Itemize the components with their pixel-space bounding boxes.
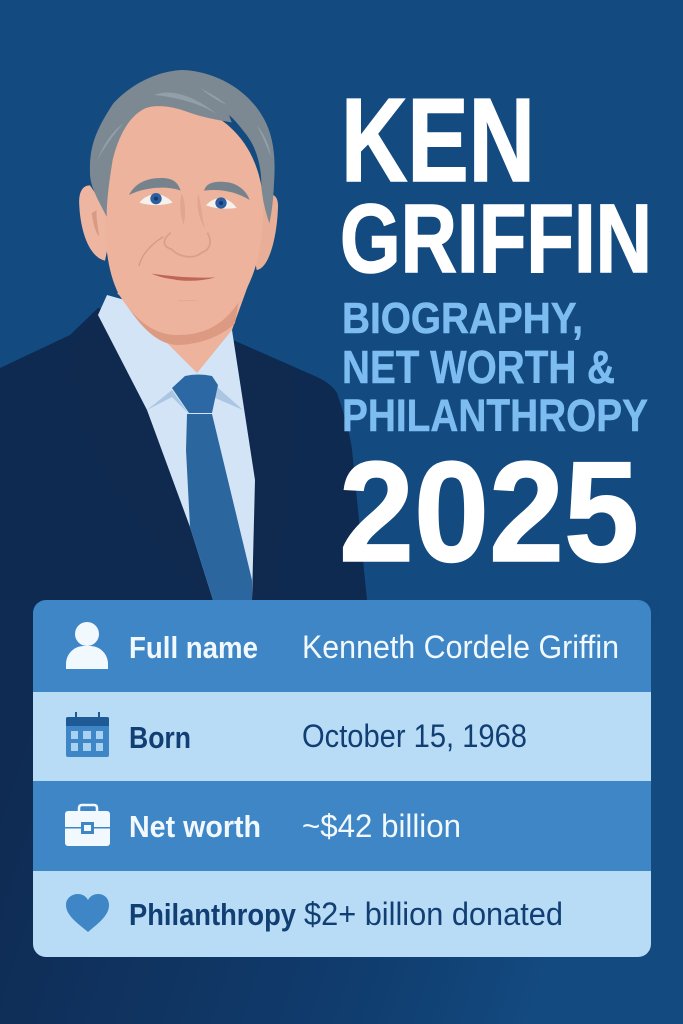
row: born xyxy=(66,712,527,757)
icon: calendar xyxy=(66,712,109,757)
eye white xyxy=(206,198,237,209)
chin shadow xyxy=(117,290,240,345)
right collar shadow xyxy=(213,387,243,410)
tie knot xyxy=(172,374,218,413)
left collar shadow xyxy=(147,390,188,413)
tie xyxy=(172,374,252,600)
value: ~$42 billion xyxy=(302,808,461,844)
pupil xyxy=(219,201,223,205)
left lapel xyxy=(66,308,213,600)
subtitle: biography: BIOGRAPHY, xyxy=(342,294,583,343)
left ear xyxy=(79,185,113,261)
nose xyxy=(164,233,210,257)
pupil xyxy=(154,197,158,201)
nose bridge shadows xyxy=(180,193,205,228)
label: Philanthropy xyxy=(129,897,297,932)
left ear shade xyxy=(92,210,99,237)
right eye xyxy=(206,197,237,209)
label: Born xyxy=(129,720,191,755)
label: Full name xyxy=(129,630,258,665)
lower background gradient xyxy=(0,600,683,1024)
icon: briefcase xyxy=(65,805,110,846)
head xyxy=(79,70,278,345)
mouth xyxy=(152,274,215,281)
chin crease xyxy=(178,299,197,302)
right lapel xyxy=(234,341,294,600)
right ear xyxy=(250,195,278,270)
row: philanthropy xyxy=(66,894,563,932)
iris xyxy=(150,193,162,204)
right eyebrow xyxy=(204,182,250,200)
shirt xyxy=(98,295,255,600)
hair xyxy=(90,70,275,223)
info table xyxy=(33,600,651,957)
icon: heart xyxy=(66,894,109,932)
tie blade xyxy=(186,414,252,600)
value: Kenneth Cordele Griffin xyxy=(302,629,619,665)
row backgrounds xyxy=(33,600,651,957)
value: $2+ billion donated xyxy=(304,896,563,932)
left eye xyxy=(139,193,173,205)
face xyxy=(105,103,263,335)
left eyebrow xyxy=(129,178,181,195)
title: KEN: KEN xyxy=(341,74,535,207)
suit jacket xyxy=(0,308,367,600)
smile line xyxy=(139,237,163,266)
row: full name xyxy=(66,622,619,669)
icon: person xyxy=(66,622,108,669)
hair highlights xyxy=(97,88,271,160)
year: 2025 xyxy=(339,433,639,592)
subtitle: net worth: NET WORTH & xyxy=(342,341,615,393)
row: net worth xyxy=(65,805,461,846)
value: October 15, 1968 xyxy=(302,718,527,754)
eye white xyxy=(139,194,173,205)
portrait xyxy=(0,70,367,600)
label: Net worth xyxy=(129,809,261,844)
iris xyxy=(215,197,227,209)
neck xyxy=(117,270,250,373)
